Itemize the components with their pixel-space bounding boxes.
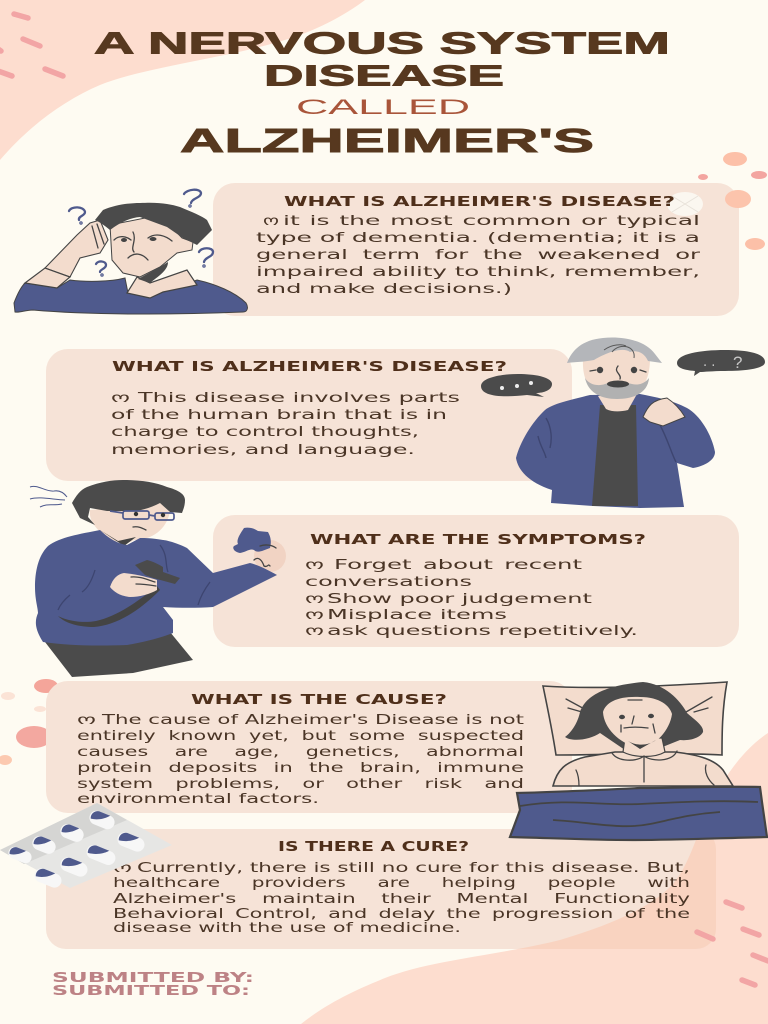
text block: The cause of Alzheimer's Disease is not bbox=[100, 712, 524, 728]
heading: WHAT IS THE CAUSE? bbox=[191, 692, 447, 708]
neck bbox=[623, 738, 665, 756]
text block: healthcare providers are helping people with bbox=[113, 875, 690, 891]
text block: environmental factors. bbox=[77, 791, 319, 807]
decorative dots: left bbox=[0, 679, 82, 765]
eyes bbox=[597, 367, 603, 373]
right speech bubble: . . bbox=[703, 355, 715, 370]
submitted by and to bbox=[52, 970, 254, 999]
glasses bbox=[110, 511, 174, 520]
text block: ო bbox=[113, 860, 132, 876]
pills bbox=[7, 809, 147, 890]
text block: general term for the weakened or bbox=[256, 247, 701, 263]
text block: of the human brain that is in bbox=[111, 407, 447, 423]
title: A NERVOUS SYSTEM bbox=[94, 26, 670, 60]
left hand bbox=[110, 573, 157, 597]
beard bbox=[585, 378, 649, 399]
text block bbox=[256, 213, 701, 297]
illustration: elderly woman in bed bbox=[510, 682, 767, 840]
panel: symptoms bbox=[213, 515, 739, 647]
body bbox=[553, 752, 733, 786]
arm and hand bbox=[45, 220, 108, 277]
symptoms list: Forget about recent bbox=[334, 557, 582, 573]
text block: entirely known yet, but some suspected bbox=[77, 728, 524, 744]
jacket folds bbox=[538, 418, 676, 462]
text block: type of dementia. (dementia; it is a bbox=[256, 230, 700, 246]
panel: cure bbox=[46, 829, 716, 949]
background blob: bottom right bbox=[301, 733, 768, 1024]
title: CALLED bbox=[296, 96, 470, 119]
background blob: top left bbox=[0, 0, 365, 160]
right hand bbox=[254, 540, 286, 572]
face bbox=[110, 215, 193, 277]
shirt bbox=[592, 405, 638, 506]
text block: system problems, or other risk and bbox=[77, 776, 524, 792]
illustration: blister pack of pills bbox=[0, 803, 172, 890]
heading: WHAT ARE THE SYMPTOMS? bbox=[310, 532, 646, 548]
text block bbox=[111, 390, 460, 458]
symptoms list bbox=[305, 557, 638, 639]
right speech bubble: ? bbox=[733, 353, 742, 372]
hand bbox=[643, 398, 685, 426]
face bbox=[603, 697, 672, 748]
symptoms list: ო bbox=[305, 591, 324, 607]
panel: parts of the brain bbox=[46, 349, 572, 481]
heading: WHAT IS ALZHEIMER'S DISEASE? bbox=[112, 359, 507, 375]
symptoms list: Misplace items bbox=[327, 607, 507, 623]
symptoms list: Show poor judgement bbox=[327, 591, 592, 607]
symptoms list: ო bbox=[305, 557, 324, 573]
text block: impaired ability to think, remember, bbox=[256, 264, 700, 280]
motion lines bbox=[30, 486, 67, 507]
text block bbox=[77, 712, 524, 807]
symptoms list: ო bbox=[305, 623, 324, 639]
facial features bbox=[114, 232, 172, 260]
text block: ო bbox=[77, 712, 96, 728]
text block: disease with the use of medicine. bbox=[113, 920, 461, 936]
face bbox=[583, 348, 650, 398]
hair bbox=[95, 203, 212, 245]
gray hair bbox=[567, 338, 662, 363]
collar bbox=[127, 270, 197, 298]
text block: ო bbox=[111, 390, 130, 406]
text block: causes are age, genetics, abnormal bbox=[77, 744, 524, 760]
question marks bbox=[69, 190, 213, 276]
sweater bbox=[14, 278, 247, 314]
title: ALZHEIMER'S bbox=[180, 122, 594, 159]
text block bbox=[113, 860, 690, 936]
text block: Alzheimer's maintain their Mental Functionality bbox=[113, 891, 690, 907]
blister sheet bbox=[0, 803, 172, 888]
pants bbox=[45, 632, 193, 677]
text block: This disease involves parts bbox=[136, 390, 460, 406]
symptoms list: ო bbox=[305, 607, 324, 623]
puzzle piece in left hand bbox=[135, 560, 180, 584]
puzzle piece in right hand bbox=[233, 528, 271, 553]
text block: protein deposits in the brain, immune bbox=[77, 760, 524, 776]
illustration: old man with speech bubbles bbox=[481, 338, 765, 508]
neck bbox=[598, 394, 637, 411]
heading: IS THERE A CURE? bbox=[278, 839, 469, 855]
right speech bubble bbox=[677, 350, 765, 376]
neck and face bbox=[90, 503, 170, 543]
decorative dots: top right bbox=[698, 152, 767, 250]
sweater folds bbox=[58, 545, 210, 610]
symptoms list: ask questions repetitively. bbox=[327, 623, 638, 639]
sweater hem shadow bbox=[58, 586, 160, 627]
text block: ო bbox=[263, 213, 279, 229]
text block: Currently, there is still no cure for this disease. But, bbox=[137, 860, 690, 876]
illustration: forgetful man with puzzle pieces bbox=[30, 480, 286, 677]
jacket bbox=[516, 394, 715, 508]
text block: it is the most common or typical bbox=[283, 213, 700, 229]
panel: cause bbox=[46, 681, 572, 813]
decorative dashes: bottom right bbox=[697, 902, 768, 985]
pillow bbox=[543, 682, 727, 755]
text block: charge to control thoughts, bbox=[111, 424, 419, 440]
chin shadow bbox=[138, 262, 168, 283]
left speech bubble bbox=[481, 374, 552, 397]
illustration: confused man scratching head bbox=[14, 190, 247, 314]
submitted by and to: SUBMITTED BY: bbox=[52, 970, 254, 986]
title: DISEASE bbox=[264, 60, 504, 92]
title bbox=[94, 26, 670, 159]
text block: Behavioral Control, and delay the progression of the bbox=[113, 906, 690, 922]
decorative dashes: top left bbox=[0, 14, 63, 76]
sweater bbox=[35, 530, 277, 646]
hair bbox=[72, 480, 185, 525]
hair bbox=[565, 682, 703, 750]
shirt cuff bbox=[25, 268, 70, 288]
blanket bbox=[510, 787, 767, 840]
text block: and make decisions.) bbox=[256, 281, 512, 297]
symptoms list: conversations bbox=[305, 574, 472, 590]
mouth bbox=[607, 380, 629, 388]
heading: WHAT IS ALZHEIMER'S DISEASE? bbox=[284, 194, 675, 210]
submitted by and to: SUBMITTED TO: bbox=[52, 983, 250, 999]
text block: memories, and language. bbox=[111, 442, 415, 458]
panel: what is Alzheimer's disease bbox=[213, 183, 751, 316]
